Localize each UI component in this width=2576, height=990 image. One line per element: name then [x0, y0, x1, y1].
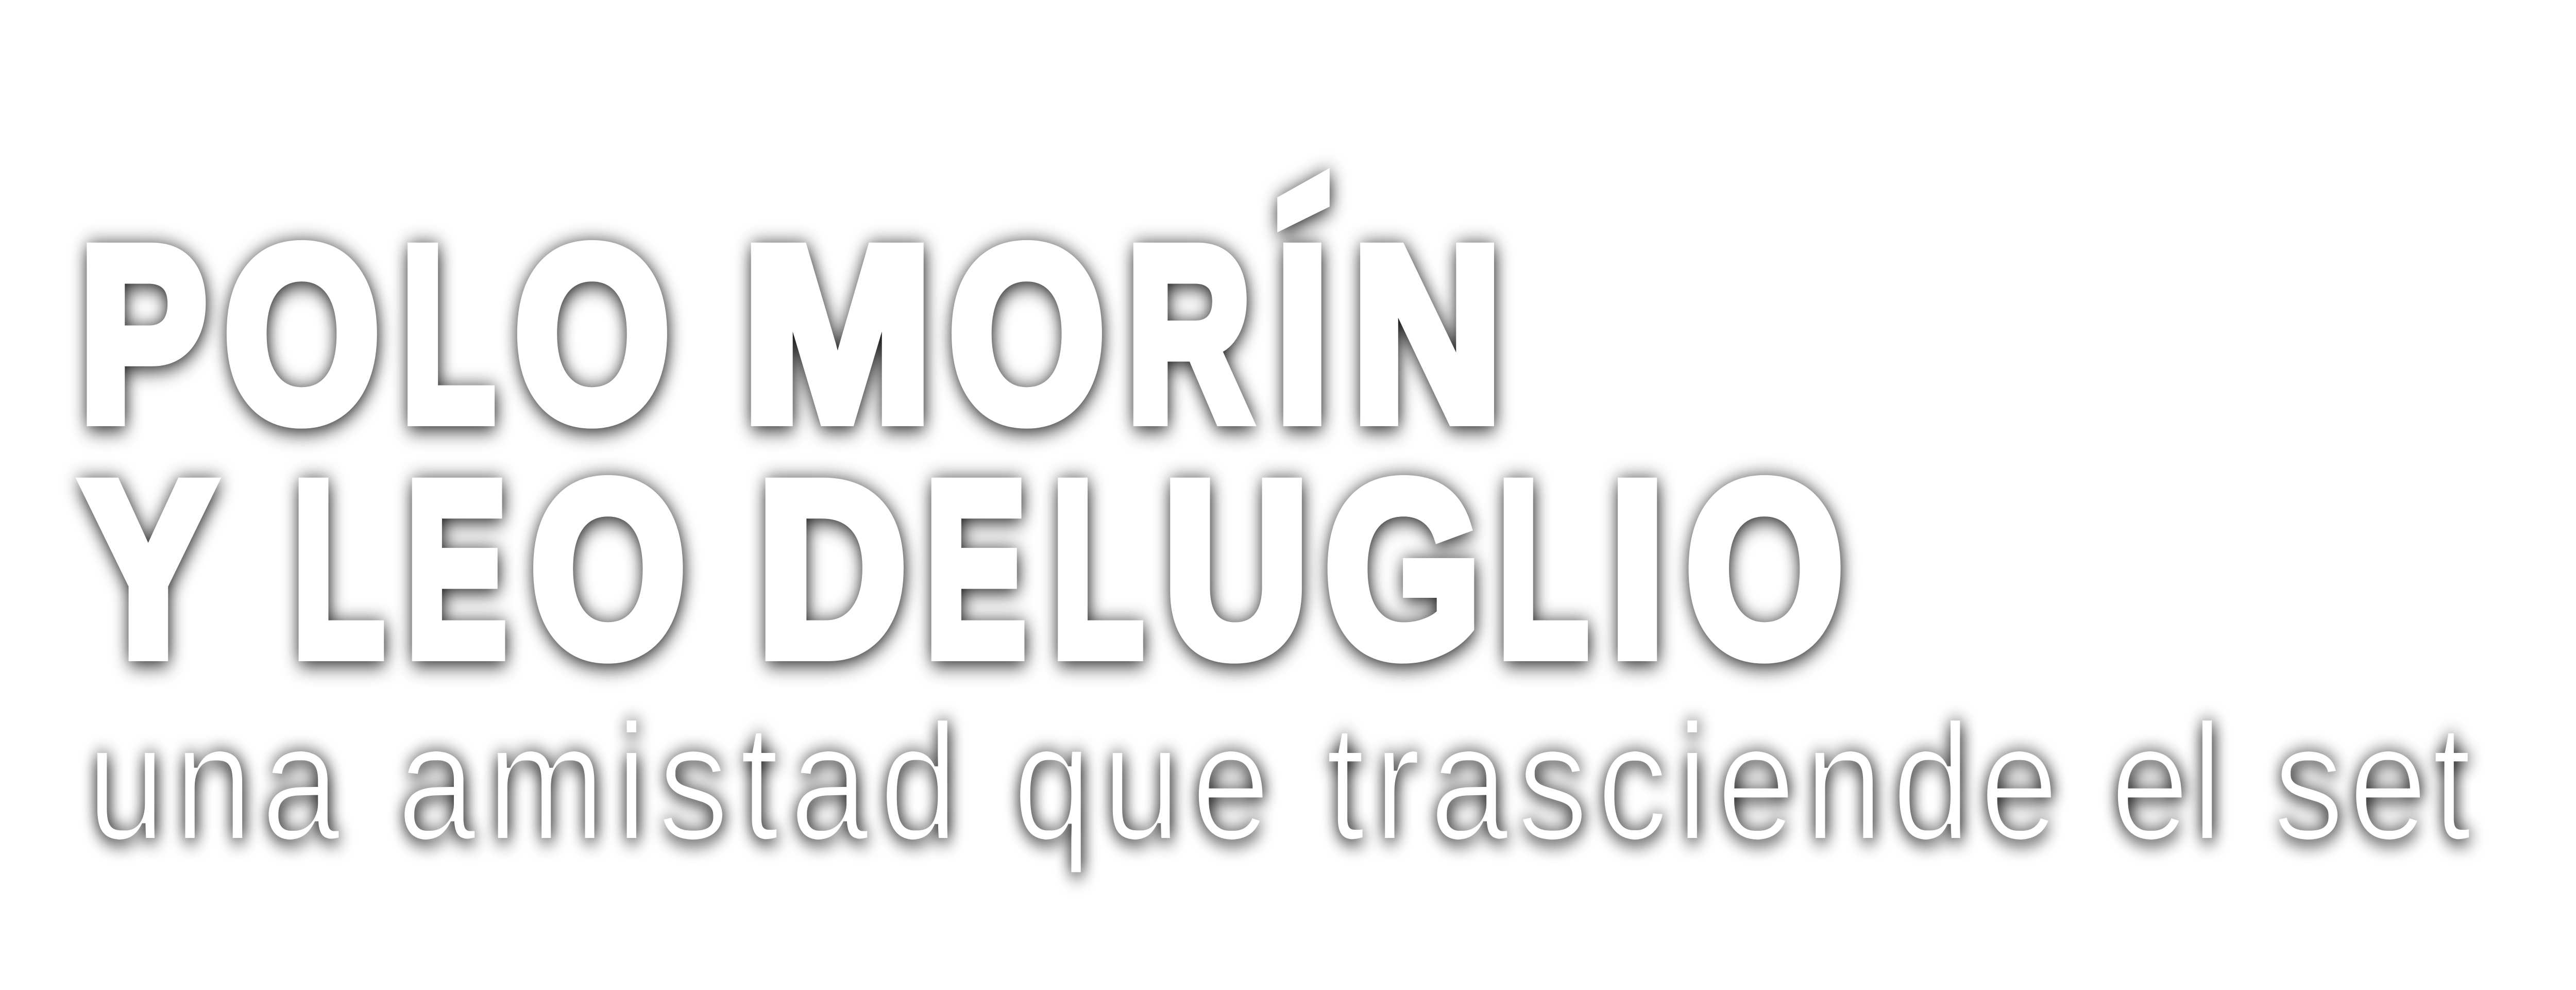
- heading line 1: POLO MORÍN: M: [742, 196, 933, 473]
- heading line 1: POLO MORÍN: L: [401, 195, 495, 472]
- heading line 2: Y LEO DELUGLIO: G: [1325, 431, 1481, 707]
- heading line 2: Y LEO DELUGLIO: U: [1163, 430, 1309, 707]
- heading line 1: POLO MORÍN: O: [514, 196, 670, 472]
- heading line 2: Y LEO DELUGLIO: L: [1052, 431, 1144, 708]
- subtitle: una amistad que trasciende el set: que: [1013, 690, 1280, 875]
- heading line 2: Y LEO DELUGLIO: [81, 430, 1843, 708]
- heading line 2: Y LEO DELUGLIO: E: [406, 431, 507, 708]
- subtitle: una amistad que trasciende el set: set: [2273, 690, 2476, 874]
- subtitle: una amistad que trasciende el set: una: [87, 690, 348, 874]
- subtitle: una amistad que trasciende el set: trasciende: [1326, 690, 2067, 874]
- subtitle: una amistad que trasciende el set: el: [2110, 690, 2225, 874]
- heading line 1: POLO MORÍN: O: [224, 195, 380, 472]
- heading line 2: Y LEO DELUGLIO: I: [1610, 431, 1665, 708]
- heading line 1: POLO MORÍN: P: [79, 196, 207, 473]
- subtitle: una amistad que trasciende el set: amistad: [397, 690, 969, 874]
- heading line 2: Y LEO DELUGLIO: E: [925, 431, 1026, 708]
- heading line 1: POLO MORÍN: N: [1352, 196, 1502, 473]
- heading line 2: Y LEO DELUGLIO: O: [531, 431, 686, 707]
- subtitle: una amistad que trasciende el set: [87, 690, 2476, 875]
- heading line 2: Y LEO DELUGLIO: O: [1686, 431, 1843, 708]
- heading line 1: POLO MORÍN: O: [949, 195, 1105, 472]
- heading line 2: Y LEO DELUGLIO: D: [757, 430, 907, 707]
- heading line 2: Y LEO DELUGLIO: Y: [81, 431, 215, 707]
- heading line 2: Y LEO DELUGLIO: L: [1498, 431, 1588, 707]
- infographic title block: [67, 159, 2480, 889]
- heading line 2: Y LEO DELUGLIO: L: [293, 431, 384, 708]
- heading line 1: POLO MORÍN: Í: [1276, 196, 1335, 473]
- heading line 1: POLO MORÍN: [79, 168, 1502, 473]
- heading line 1: POLO MORÍN: R: [1126, 196, 1251, 472]
